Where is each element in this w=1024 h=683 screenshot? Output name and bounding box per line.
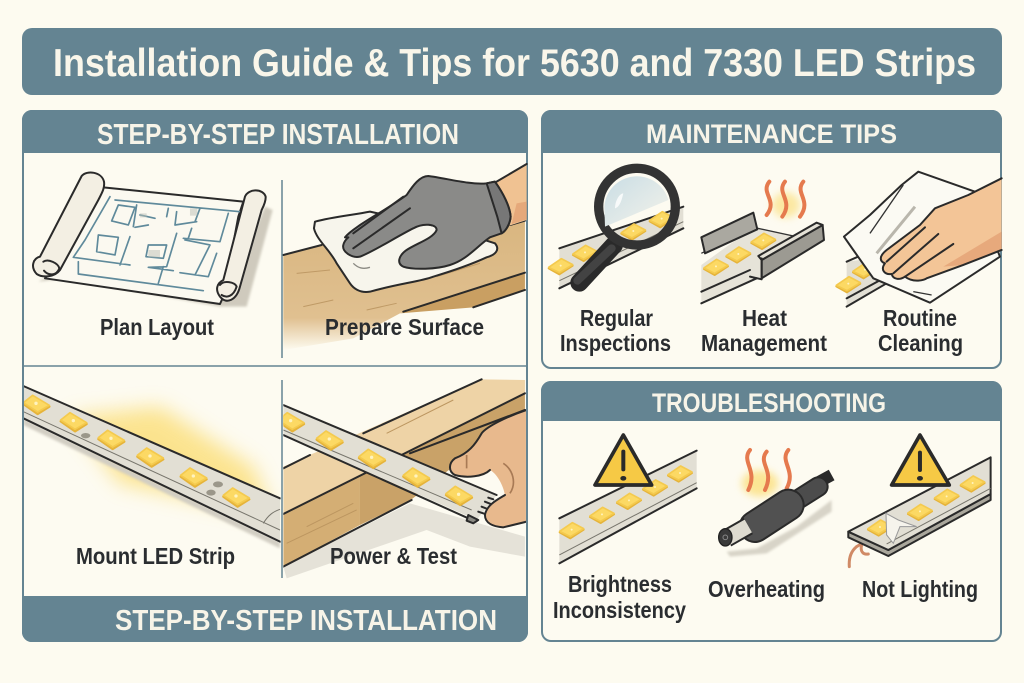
label: heat management: Heat (742, 305, 787, 331)
label: routine cleaning (878, 305, 963, 356)
panel: maintenance tips (541, 110, 1002, 368)
panel heading: step-by-step installation: STEP-BY-STEP INSTALLATION (97, 119, 459, 151)
label: brightness inconsistency (553, 571, 686, 623)
label: mount LED strip: Mount LED Strip (76, 543, 235, 569)
label: overheating: Overheating (708, 576, 825, 602)
footer heading: step-by-step installation: STEP-BY-STEP INSTALLATION (115, 605, 497, 637)
label: regular inspections (560, 305, 671, 356)
icon: heat management channel (701, 182, 824, 303)
illustration: power and test (278, 379, 527, 578)
label: regular inspections: Inspections (560, 330, 671, 356)
divider: horizontal middle (23, 365, 527, 367)
icon: magnifier over LED strip (549, 168, 683, 288)
label: brightness inconsistency: Inconsistency (553, 597, 686, 623)
panel heading: troubleshooting: TROUBLESHOOTING (652, 388, 886, 418)
label: power and test: Power & Test (330, 543, 457, 569)
divider: vertical bottom (281, 380, 283, 578)
icon: not lighting strip with warning (848, 435, 991, 567)
panel heading: troubleshooting (541, 381, 1002, 421)
label: heat management: Management (701, 330, 827, 356)
illustration: mount LED strip (23, 386, 280, 548)
label: routine cleaning: Cleaning (878, 330, 963, 356)
panel heading: maintenance tips: MAINTENANCE TIPS (646, 119, 897, 149)
label: plan layout: Plan Layout (100, 314, 214, 340)
label: prepare surface: Prepare Surface (325, 314, 484, 340)
illustration: prepare surface with glove and cloth (283, 164, 527, 350)
label: heat management (701, 305, 827, 356)
icon: overheating power connector (719, 450, 832, 557)
icon: brightness inconsistency strip and warning (559, 435, 697, 563)
panel heading: maintenance tips (541, 110, 1002, 153)
title banner (22, 28, 1002, 95)
footer heading: step-by-step installation (22, 596, 528, 642)
label: brightness inconsistency: Brightness (568, 571, 672, 597)
label: regular inspections: Regular (580, 305, 653, 331)
icon: cleaning hand and cloth (836, 172, 1002, 307)
label: not lighting: Not Lighting (862, 576, 978, 602)
divider: vertical top (281, 180, 283, 358)
panel: step-by-step installation (22, 110, 528, 642)
panel heading: step-by-step installation (22, 110, 528, 153)
label: routine cleaning: Routine (883, 305, 957, 331)
illustration: plan layout blueprint (33, 173, 273, 307)
panel: troubleshooting (541, 381, 1002, 641)
